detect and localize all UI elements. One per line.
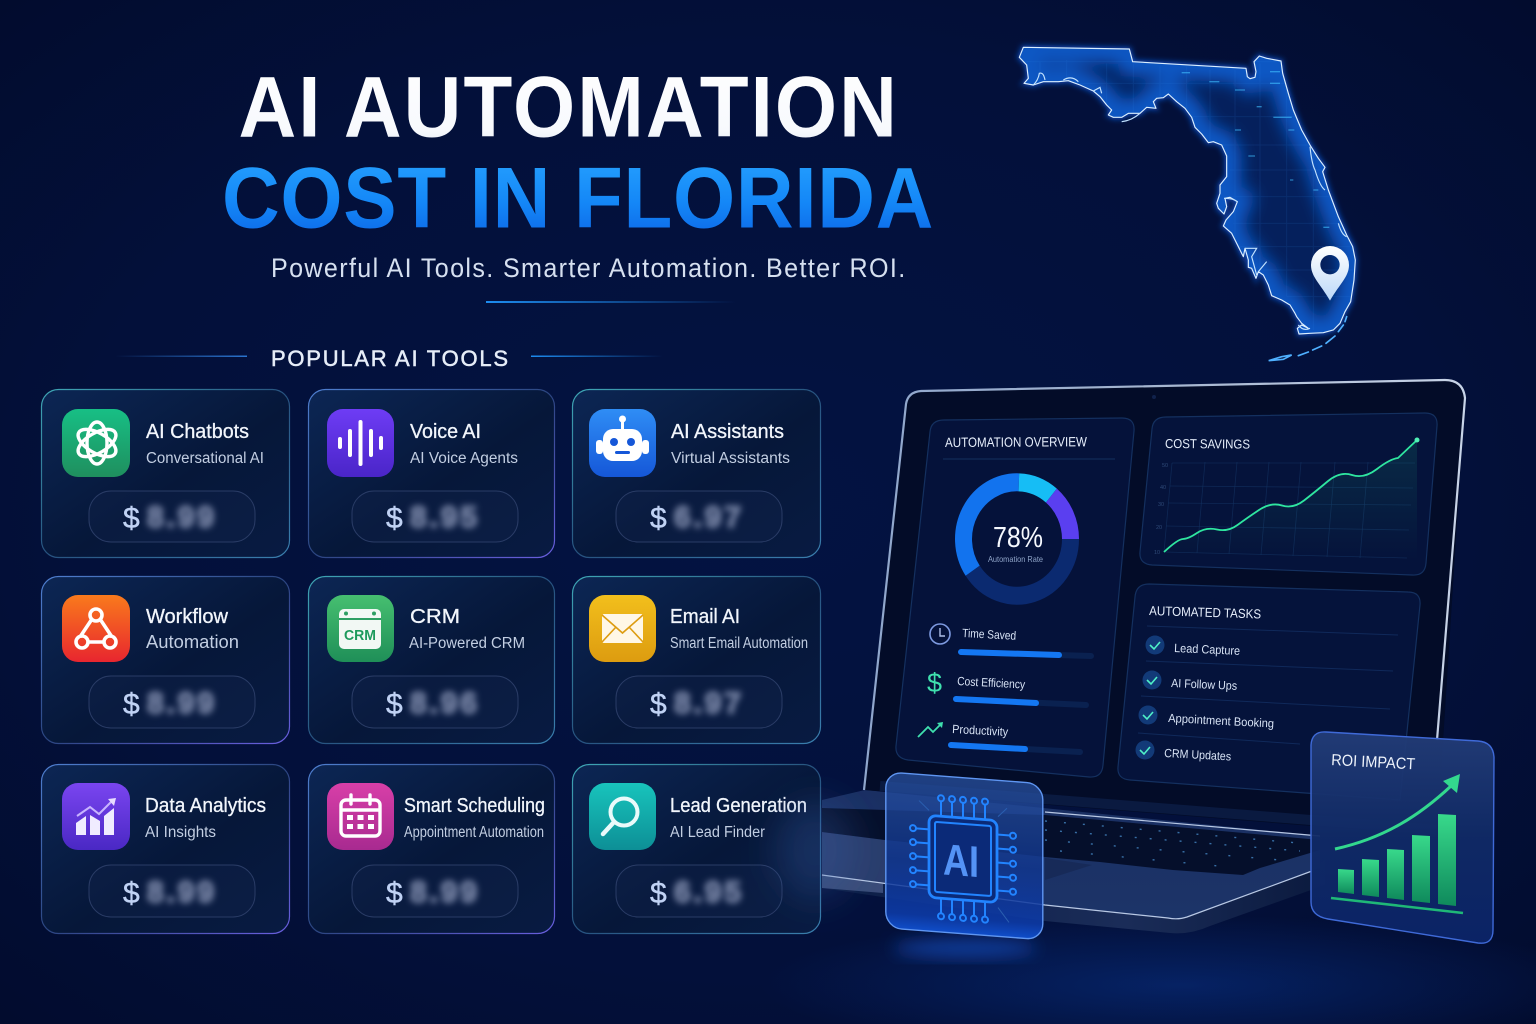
metric: cost efficiency: Cost Efficiency — [957, 674, 1025, 692]
task: CRM updates: CRM Updates — [1164, 746, 1231, 764]
blurred price: 6.97 — [674, 501, 741, 534]
line chart: 50 — [1162, 463, 1168, 469]
price pill — [352, 676, 518, 728]
panel: Smart Scheduling — [308, 764, 554, 934]
blurred price: 8.96 — [410, 687, 477, 720]
dashboard panel: cost savings — [1140, 413, 1437, 575]
dollar sign: $ — [386, 877, 403, 910]
label: AI Chatbots — [146, 421, 249, 443]
price pill — [616, 491, 782, 542]
line chart: 10 — [1154, 550, 1160, 556]
line chart: 40 — [1160, 485, 1166, 491]
sublabel: Virtual Assistants — [671, 450, 790, 467]
price pill — [89, 676, 255, 728]
donut chart — [964, 482, 1070, 596]
label: AI Assistants — [671, 421, 784, 443]
panel: Workflow Automation — [42, 576, 290, 744]
line chart: 30 — [1158, 502, 1164, 508]
icon: CRM window: CRM — [344, 628, 376, 644]
panel: AI Assistants — [572, 390, 820, 558]
label: Voice AI — [410, 421, 481, 443]
dollar sign: $ — [650, 877, 667, 910]
icon: workflow triangle — [62, 595, 130, 662]
dashboard panel: automated tasks — [1118, 584, 1420, 800]
map outline — [1019, 47, 1355, 334]
blurred price: 8.99 — [147, 876, 214, 909]
sublabel: Automation — [146, 632, 239, 652]
icon: magnifier — [589, 783, 656, 850]
chip card — [886, 772, 1043, 940]
sublabel: AI-Powered CRM — [409, 635, 525, 652]
icon: envelope — [589, 595, 656, 662]
metric: cost efficiency — [927, 668, 1086, 705]
map body — [1020, 48, 1355, 334]
label: Data Analytics — [145, 795, 266, 817]
panel: Data Analytics — [42, 764, 290, 934]
blurred price: 8.99 — [147, 687, 214, 720]
laptop lid — [864, 380, 1465, 836]
dollar sign: $ — [386, 688, 403, 721]
panel: Voice AI — [308, 390, 554, 558]
blurred price: 8.99 — [410, 876, 477, 909]
price pill — [352, 491, 518, 542]
donut caption: Automation Rate — [988, 554, 1043, 564]
price pill — [616, 676, 782, 728]
icon: location pin — [1311, 246, 1349, 301]
laptop base — [822, 790, 1325, 933]
metric: productivity: Productivity — [952, 722, 1008, 739]
florida keys — [1269, 317, 1347, 361]
icon: Florida map — [1014, 42, 1361, 362]
icon: robot — [589, 409, 656, 477]
sublabel: Appointment Automation — [404, 824, 544, 841]
blurred price: 6.95 — [674, 876, 741, 909]
sublabel: AI Lead Finder — [670, 824, 765, 841]
panel: Lead Generation — [572, 764, 820, 934]
task: AI follow ups: AI Follow Ups — [1171, 676, 1237, 693]
growth arrow — [1335, 774, 1460, 849]
task: AI follow ups — [1142, 670, 1237, 693]
metric: time saved — [930, 624, 1091, 656]
bar chart — [1338, 814, 1456, 906]
keyboard — [822, 808, 1320, 875]
label: Email AI — [670, 606, 740, 628]
heading: AUTOMATION OVERVIEW — [945, 434, 1087, 450]
sublabel: Smart Email Automation — [670, 635, 808, 652]
dollar sign: $ — [386, 502, 403, 535]
icon: voice waveform — [327, 409, 394, 477]
subtitle: Powerful AI Tools. Smarter Automation. Better ROI. — [271, 252, 905, 283]
blurred price: 8.95 — [410, 501, 477, 534]
dollar sign: $ — [650, 688, 667, 721]
metric: productivity — [918, 722, 1080, 752]
chip label: AI — [943, 835, 979, 887]
title — [222, 59, 933, 246]
hinge and front highlights — [822, 812, 1320, 919]
panel: Email AI — [572, 576, 820, 744]
label: Lead Generation — [670, 795, 807, 817]
heading: COST SAVINGS — [1165, 436, 1250, 452]
label: CRM — [410, 606, 460, 628]
price pill — [89, 865, 255, 917]
map outer glow — [1019, 47, 1355, 334]
heading: AUTOMATED TASKS — [1149, 603, 1262, 622]
price pill — [89, 491, 255, 542]
sublabel: AI Insights — [145, 824, 216, 841]
title line 1: AI AUTOMATION — [238, 59, 897, 155]
coastal inlets and barrier islands — [1033, 73, 1347, 329]
chart baseline — [1331, 898, 1463, 913]
dollar sign: $ — [123, 502, 140, 535]
dollar sign: $ — [650, 502, 667, 535]
metric: time saved: Time Saved — [962, 626, 1017, 643]
dollar sign: $ — [123, 877, 140, 910]
icon: calendar — [327, 783, 394, 850]
task: appointment booking — [1138, 706, 1274, 731]
price pill — [352, 865, 518, 917]
task: lead capture: Lead Capture — [1174, 641, 1241, 658]
line chart: 20 — [1156, 525, 1162, 531]
sublabel: AI Voice Agents — [410, 450, 518, 467]
price pill — [616, 865, 782, 917]
blurred price: 8.99 — [147, 501, 214, 534]
dollar sign: $ — [123, 688, 140, 721]
panel: CRM — [308, 576, 554, 744]
section heading: popular AI tools: POPULAR AI TOOLS — [271, 346, 508, 371]
sublabel: Conversational AI — [146, 450, 264, 467]
dashboard panel: automation overview — [896, 418, 1134, 777]
task: lead capture — [1146, 636, 1241, 658]
light bleed — [775, 800, 855, 900]
line chart — [1154, 438, 1420, 560]
title divider — [486, 301, 736, 303]
webcam — [1152, 395, 1156, 399]
icon: chatbot knot — [62, 409, 130, 477]
task: appointment booking: Appointment Booking — [1168, 711, 1274, 731]
label: Workflow — [146, 606, 229, 628]
icon: analytics chart — [62, 783, 130, 850]
card: ROI impact — [1311, 732, 1494, 943]
card: AI chip — [886, 772, 1043, 957]
floor glow — [760, 915, 1536, 1024]
blurred price: 8.97 — [674, 687, 741, 720]
panel: AI Chatbots — [42, 390, 290, 558]
icon: AI chip — [910, 793, 1016, 925]
laptop — [822, 380, 1465, 933]
title line 2: COST IN FLORIDA — [222, 150, 933, 246]
icon: CRM window — [327, 595, 394, 662]
task: CRM updates — [1136, 740, 1231, 764]
metric: cost efficiency: $ — [927, 668, 942, 698]
heading: ROI IMPACT — [1331, 752, 1416, 773]
donut value: 78% — [993, 522, 1043, 554]
label: Smart Scheduling — [404, 795, 545, 817]
